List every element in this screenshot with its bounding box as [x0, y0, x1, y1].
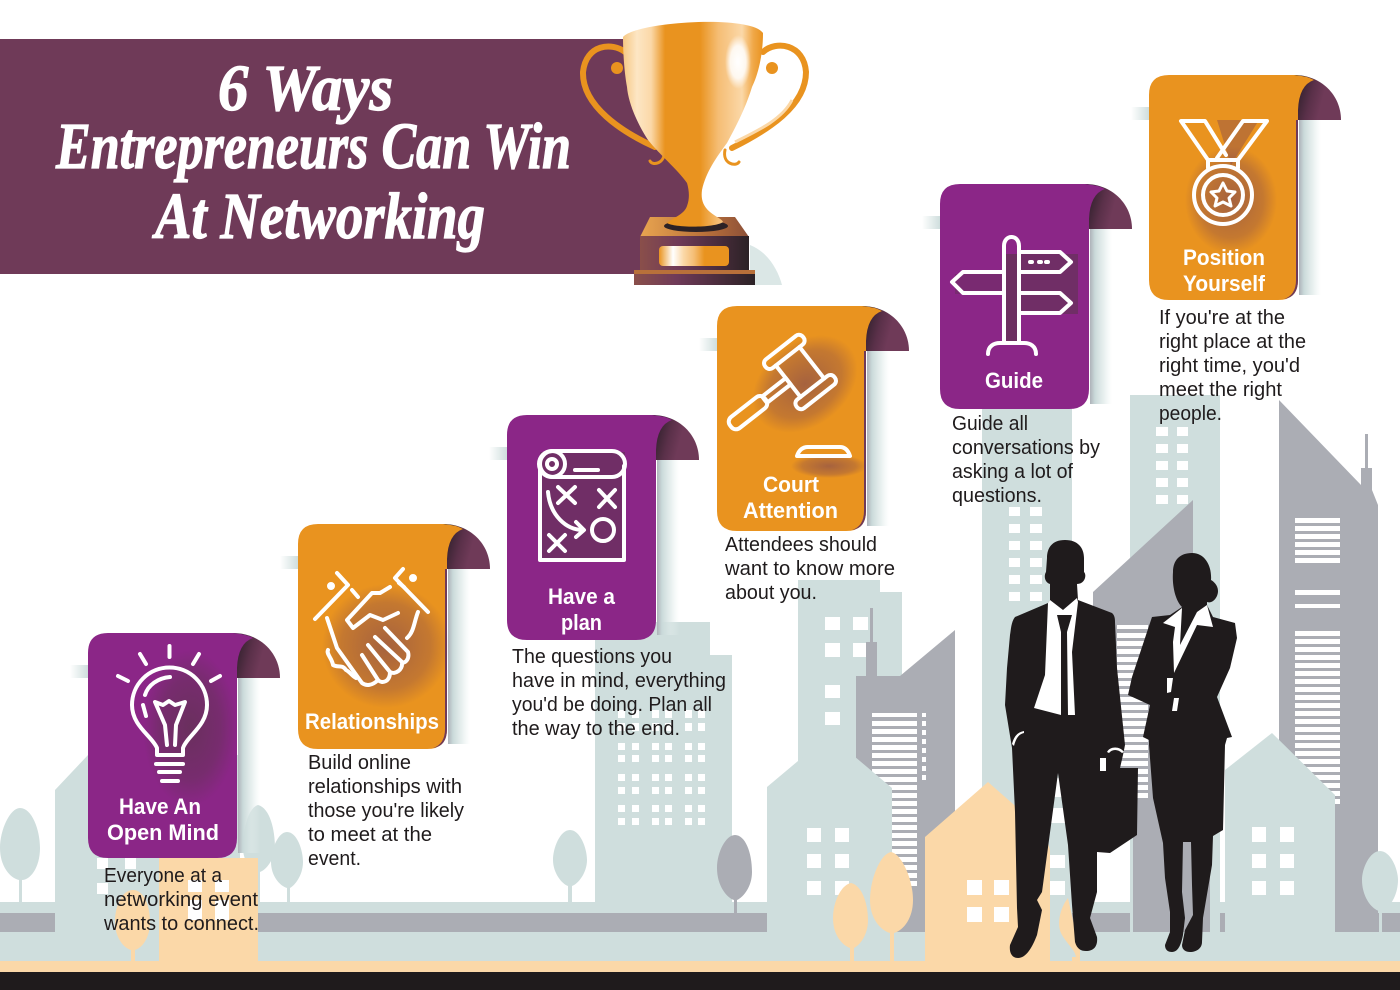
text: step 5 description: Guide all: [952, 413, 1028, 435]
step 5: guide: [922, 184, 1132, 507]
text: step 5 description: conversations by: [952, 437, 1100, 459]
heading: have an open mind: Have An: [119, 794, 201, 819]
text: step 3 description: have in mind, everything: [512, 670, 726, 692]
text: step 3 description: The questions you: [512, 646, 672, 668]
text: step 4 description: Attendees should: [725, 534, 877, 556]
text: step 6 description: If you're at the: [1159, 307, 1285, 329]
heading: have an open mind: Open Mind: [107, 820, 219, 845]
text: step 4 description: want to know more: [724, 558, 895, 580]
text: step 2 description: to meet at the: [308, 824, 432, 846]
text: step 5 description: [952, 413, 1100, 507]
card: have a plan: [489, 415, 699, 640]
text: step 5 description: asking a lot of: [952, 461, 1073, 483]
card: guide: [922, 184, 1132, 409]
icon: signpost: [952, 237, 1071, 354]
text: step 5 description: questions.: [952, 485, 1042, 507]
title: 6 Ways: [218, 52, 393, 125]
silhouette: businessman: [1005, 540, 1138, 958]
text: step 1 description: wants to connect.: [103, 913, 259, 935]
text: step 4 description: [724, 534, 895, 604]
icon: game plan board: [539, 451, 625, 560]
text: step 6 description: people.: [1159, 403, 1222, 425]
icon: medal: [1181, 121, 1267, 224]
icon: light bulb: [118, 646, 220, 781]
step 2: relationships: [280, 524, 490, 870]
text: step 1 description: Everyone at a: [104, 865, 223, 887]
text: step 6 description: right place at the: [1159, 331, 1306, 353]
heading: position yourself: Yourself: [1183, 271, 1266, 296]
title banner: [0, 39, 695, 274]
text: step 4 description: about you.: [725, 582, 817, 604]
cuffs: [1167, 678, 1179, 711]
step 6: position yourself: [1131, 75, 1341, 425]
heading: have an open mind: [107, 794, 219, 845]
step 3: have a plan: [489, 415, 726, 740]
footer band: [0, 972, 1400, 990]
heading: relationships: Relationships: [305, 709, 439, 734]
shirt: [1034, 598, 1078, 715]
icon: trophy: [583, 22, 806, 285]
heading: court attention: Court: [763, 472, 820, 497]
heading: guide: Guide: [985, 368, 1043, 393]
text: step 2 description: Build online: [308, 752, 411, 774]
text: step 2 description: [308, 752, 464, 870]
card: court attention: [699, 306, 909, 531]
text: step 6 description: meet the right: [1159, 379, 1282, 401]
background: city skyline: [0, 395, 1400, 972]
icon: handshake: [315, 569, 428, 685]
card: have an open mind: [70, 633, 280, 858]
heading: position yourself: [1183, 245, 1266, 296]
card: relationships: [280, 524, 490, 749]
blouse: [1163, 605, 1213, 673]
title: [55, 52, 571, 253]
text: step 3 description: [512, 646, 726, 740]
text: step 3 description: you'd be doing. Plan all: [512, 694, 712, 716]
step 1: have an open mind: [70, 633, 280, 935]
title: At Networking: [152, 180, 485, 253]
text: step 6 description: [1159, 307, 1306, 425]
cuffs: [1012, 731, 1124, 771]
text: step 2 description: those you're likely: [308, 800, 464, 822]
heading: have a plan: Have a: [548, 584, 616, 609]
text: step 3 description: the way to the end.: [512, 718, 680, 740]
text: step 6 description: right time, you'd: [1159, 355, 1300, 377]
title: Entrepreneurs Can Win: [55, 110, 571, 183]
heading: have a plan: [548, 584, 616, 635]
step 4: court attention: [699, 306, 909, 604]
silhouette: businesswoman: [1128, 553, 1237, 952]
heading: position yourself: Position: [1183, 245, 1265, 270]
text: step 1 description: [103, 865, 259, 935]
heading: court attention: Attention: [743, 498, 838, 523]
icon: gavel: [712, 333, 850, 456]
card: position yourself: [1131, 75, 1341, 300]
text: step 2 description: relationships with: [308, 776, 462, 798]
text: step 2 description: event.: [308, 848, 361, 870]
heading: have a plan: plan: [561, 610, 602, 635]
text: step 1 description: networking event: [104, 889, 258, 911]
heading: court attention: [743, 472, 838, 523]
